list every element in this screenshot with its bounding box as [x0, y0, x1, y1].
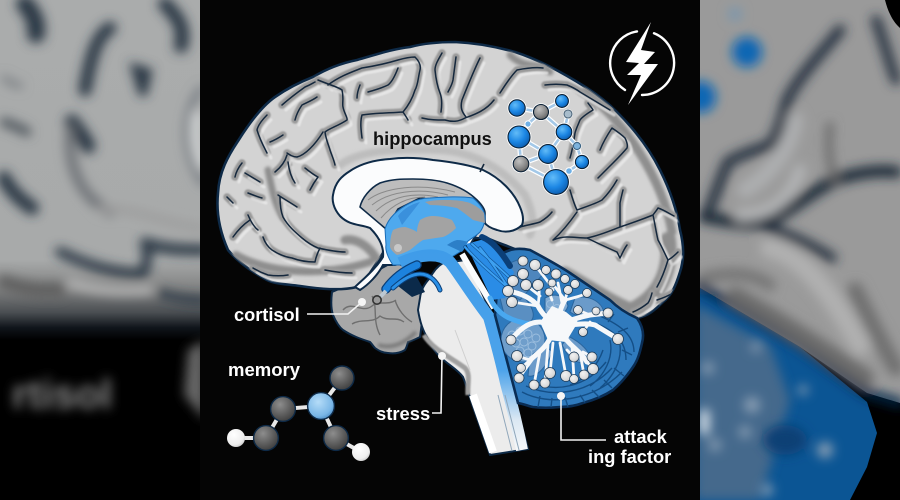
white stripe beside band [462, 254, 494, 308]
sulcus lines [227, 53, 678, 312]
lobule cells [508, 300, 560, 357]
thalamus blue region [385, 197, 485, 265]
label: attacking factor [588, 426, 671, 467]
cerebellum [495, 249, 643, 408]
fibres into cerebellum [465, 237, 530, 324]
blurred label: rtisol [12, 371, 112, 417]
blue tubes under thalamus [386, 265, 440, 290]
temporal lobe [331, 262, 425, 353]
blurred left band [0, 0, 205, 500]
fornix gray strip [360, 179, 485, 229]
band: cerebrum tone [695, 0, 900, 403]
upper molecule network [507, 93, 590, 196]
arbor nodes [502, 256, 624, 390]
label: attacking factor: ing factor [588, 446, 671, 467]
band: pale cerebellum tone [695, 305, 790, 500]
pale lobules [498, 258, 604, 376]
corpus callosum [333, 158, 523, 290]
leader: attacking factor [557, 392, 606, 440]
dark gap under thalamus [398, 272, 425, 297]
lower brainstem fibre lines [498, 395, 519, 451]
brainstem [418, 260, 528, 455]
gyrus highlights [231, 58, 682, 317]
label: memory: memory [228, 359, 301, 380]
label: cortisol: cortisol [234, 305, 300, 325]
label: attacking factor: attack [614, 426, 668, 447]
leader: cortisol [307, 291, 386, 314]
label: hippocampus: hippocampus [373, 128, 492, 149]
brainstem blue band [400, 255, 522, 450]
cerebrum [217, 42, 683, 318]
darker lobe bands [236, 55, 672, 312]
label: stress: stress [376, 403, 430, 424]
blurred temporal lobe edge [184, 340, 205, 420]
sulcus shadow [227, 53, 678, 312]
leader: stress [432, 352, 446, 413]
blurred right band [684, 0, 900, 500]
band: cerebellum tone [695, 285, 877, 500]
arbor vitae tree [508, 266, 618, 385]
folia [522, 314, 634, 407]
central black panel [200, 0, 700, 500]
lower molecule [227, 366, 370, 461]
icon: lightning bolt in ring [610, 22, 674, 105]
